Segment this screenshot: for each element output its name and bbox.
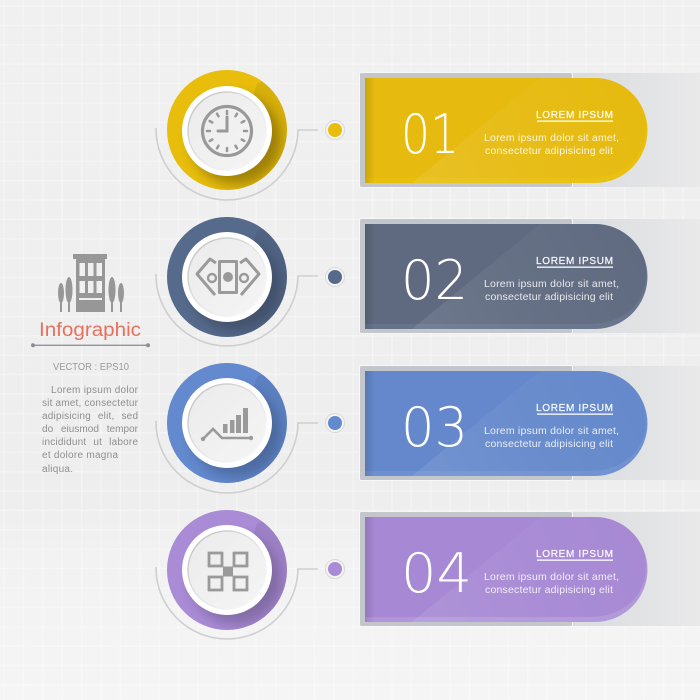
card 03: 03 — [401, 396, 468, 459]
card 02: consectetur adipisicing elit — [485, 291, 613, 303]
subtitle: VECTOR : EPS10 — [53, 362, 129, 373]
card 02: LOREM IPSUM — [536, 256, 613, 267]
paragraph: aliqua. — [42, 464, 73, 475]
card 01: LOREM IPSUM — [536, 110, 613, 121]
card 04 — [360, 512, 700, 626]
card 03: Lorem ipsum dolor sit amet, — [484, 425, 619, 437]
step 04 — [155, 510, 700, 640]
paragraph — [42, 385, 139, 475]
step 03 — [155, 363, 700, 494]
card 03: consectetur adipisicing elit — [485, 438, 613, 450]
step 01 — [155, 70, 700, 201]
connector dot 02 — [326, 268, 344, 286]
paragraph: adipisicing elit, sed — [42, 411, 138, 422]
medallion 03 — [155, 363, 318, 494]
card 02: 02 — [401, 249, 468, 312]
card 03 — [360, 366, 700, 480]
card 04: consectetur adipisicing elit — [485, 584, 613, 596]
paragraph: do eiusmod tempor — [42, 424, 139, 435]
paragraph: et dolore magna — [42, 450, 118, 461]
medallion 04 — [155, 510, 318, 640]
icon: banknotes — [197, 259, 259, 295]
paragraph: sit amet, consectetur — [42, 398, 139, 409]
icon: connected squares — [209, 553, 247, 590]
divider line with end dots — [31, 343, 150, 347]
card 02: Lorem ipsum dolor sit amet, — [484, 278, 619, 290]
paragraph: incididunt ut labore — [42, 437, 138, 448]
card 04: Lorem ipsum dolor sit amet, — [484, 571, 619, 583]
card 04: LOREM IPSUM — [536, 549, 613, 560]
panel: sidebar — [31, 254, 150, 475]
card 04: 04 — [401, 542, 472, 605]
medallion 02 — [155, 217, 318, 347]
card 01 — [360, 72, 700, 188]
card 02 — [360, 218, 700, 334]
card 01: 01 — [401, 103, 459, 166]
paragraph: Lorem ipsum dolor — [51, 385, 139, 396]
card 01: Lorem ipsum dolor sit amet, — [484, 132, 619, 144]
icon: building with trees — [58, 254, 124, 312]
connector dot 03 — [326, 414, 344, 432]
medallion 01 — [155, 70, 318, 201]
icon: clock — [202, 106, 252, 156]
step 02 — [155, 217, 700, 347]
card 01: consectetur adipisicing elit — [485, 145, 613, 157]
card 03: LOREM IPSUM — [536, 403, 613, 414]
connector dot 04 — [326, 560, 344, 578]
connector dot 01 — [326, 120, 344, 140]
icon: rising bar chart — [201, 408, 253, 441]
heading: Infographic: Infographic — [39, 320, 141, 341]
